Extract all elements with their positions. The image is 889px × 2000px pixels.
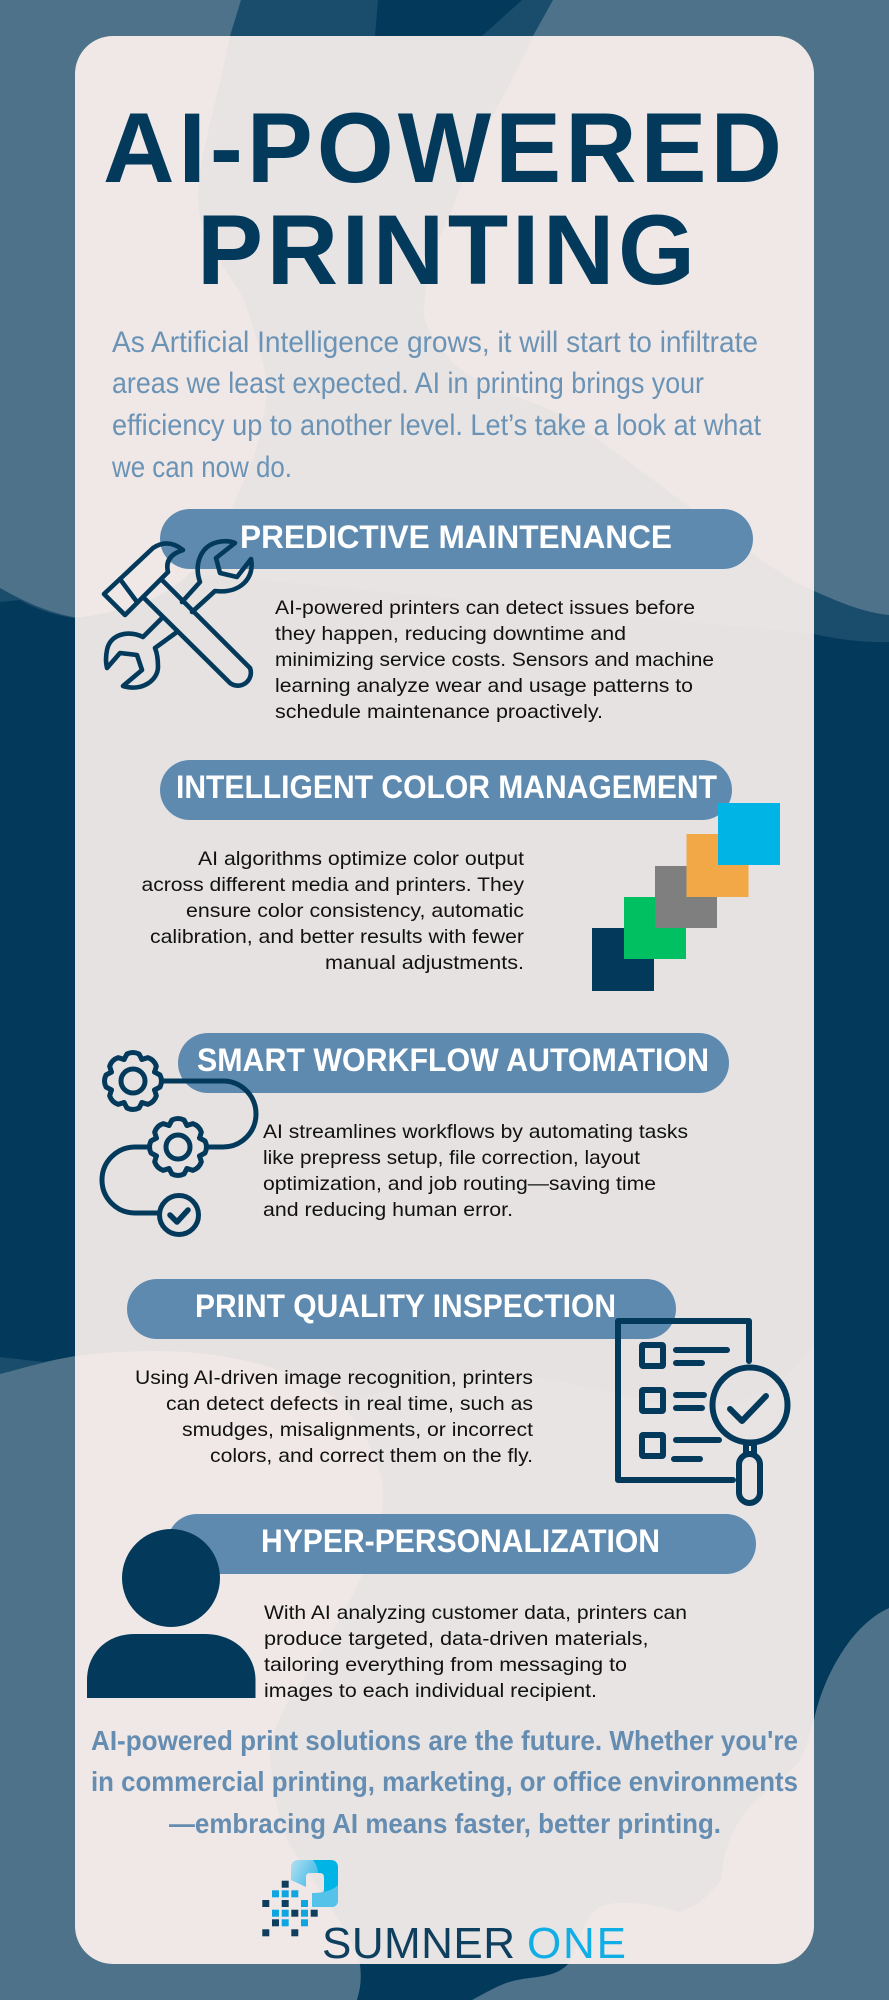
text: predictive maintenance: learning analyze wear and usage patterns to bbox=[275, 675, 693, 697]
heading: hyper-personalization bbox=[167, 1514, 756, 1574]
panel: intelligent color management bbox=[142, 760, 780, 991]
heading: predictive maintenance: PREDICTIVE MAINTENANCE bbox=[240, 519, 672, 555]
text: personalization: produce targeted, data-driven materials, bbox=[264, 1628, 648, 1650]
text: predictive maintenance: they happen, reducing downtime and bbox=[275, 623, 626, 645]
text: workflow bbox=[263, 1121, 688, 1221]
panel: smart workflow automation bbox=[102, 1033, 729, 1234]
text: personalization: tailoring everything from messaging to bbox=[264, 1654, 627, 1676]
heading: print quality inspection bbox=[127, 1279, 676, 1339]
intro text: As Artificial Intelligence grows, it will start to infiltrate bbox=[112, 326, 758, 359]
text: workflow: like prepress setup, file correction, layout bbox=[263, 1147, 641, 1169]
heading: print quality inspection: PRINT QUALITY INSPECTION bbox=[195, 1288, 616, 1324]
heading: smart workflow automation: SMART WORKFLOW AUTOMATION bbox=[197, 1042, 709, 1078]
heading: hyper-personalization: HYPER-PERSONALIZATION bbox=[261, 1523, 660, 1559]
text: workflow: and reducing human error. bbox=[263, 1199, 513, 1221]
text: personalization: With AI analyzing customer data, printers can bbox=[264, 1602, 687, 1624]
text: workflow: optimization, and job routing—saving time bbox=[263, 1173, 656, 1195]
heading: intelligent color management bbox=[160, 760, 732, 820]
heading: intelligent color management: INTELLIGENT COLOR MANAGEMENT bbox=[176, 769, 717, 805]
icon: hammer and wrench bbox=[104, 541, 252, 688]
closing statement: in commercial printing, marketing, or office environments bbox=[91, 1766, 798, 1797]
heading: smart workflow automation bbox=[178, 1033, 729, 1093]
logo wordmark bbox=[322, 1919, 626, 1968]
text: personalization bbox=[264, 1602, 687, 1702]
text: predictive maintenance bbox=[275, 597, 714, 723]
text: color management: manual adjustments. bbox=[325, 952, 524, 974]
text: predictive maintenance: schedule maintenance proactively. bbox=[275, 701, 603, 723]
text: color management: across different media and printers. They bbox=[142, 874, 524, 896]
icon: workflow gears bbox=[102, 1052, 256, 1234]
icon: color swatches bbox=[592, 803, 780, 991]
text: quality inspection: colors, and correct them on the fly. bbox=[210, 1445, 533, 1467]
text: predictive maintenance: minimizing service costs. Sensors and machine bbox=[275, 649, 714, 671]
closing statement bbox=[91, 1725, 798, 1839]
text: quality inspection bbox=[135, 1367, 534, 1467]
text: quality inspection: can detect defects in real time, such as bbox=[166, 1393, 533, 1415]
panel: hyper-personalization bbox=[87, 1514, 756, 1702]
text: predictive maintenance: AI-powered printers can detect issues before bbox=[275, 597, 695, 619]
text: color management: AI algorithms optimize color output bbox=[198, 848, 525, 870]
icon: person bbox=[87, 1529, 256, 1698]
icon: checklist with magnifier bbox=[618, 1321, 788, 1503]
title: PRINTING bbox=[197, 194, 695, 305]
heading: predictive maintenance bbox=[160, 509, 753, 569]
intro text: we can now do. bbox=[111, 451, 292, 484]
title: AI-POWERED bbox=[103, 92, 782, 203]
text: color management: ensure color consistency, automatic bbox=[186, 900, 524, 922]
text: quality inspection: smudges, misalignments, or incorrect bbox=[182, 1419, 534, 1441]
intro text: efficiency up to another level. Let’s take a look at what bbox=[112, 409, 762, 442]
text: color management bbox=[142, 848, 525, 974]
logo mark bbox=[262, 1860, 338, 1936]
text: color management: calibration, and better results with fewer bbox=[150, 926, 525, 948]
closing statement: AI-powered print solutions are the future. Whether you're bbox=[91, 1725, 798, 1756]
logo wordmark: SUMNER bbox=[322, 1919, 515, 1968]
logo: SumnerOne bbox=[262, 1860, 626, 1968]
text: workflow: AI streamlines workflows by automating tasks bbox=[263, 1121, 688, 1143]
logo wordmark: ONE bbox=[527, 1919, 626, 1968]
intro text bbox=[111, 326, 762, 484]
closing statement: —embracing AI means faster, better printing. bbox=[169, 1808, 721, 1839]
panel: predictive maintenance bbox=[104, 509, 753, 723]
intro text: areas we least expected. AI in printing brings your bbox=[112, 367, 704, 400]
text: quality inspection: Using AI-driven image recognition, printers bbox=[135, 1367, 533, 1389]
title bbox=[103, 92, 782, 305]
text: personalization: images to each individual recipient. bbox=[264, 1680, 597, 1702]
panel: print quality inspection bbox=[127, 1279, 788, 1503]
